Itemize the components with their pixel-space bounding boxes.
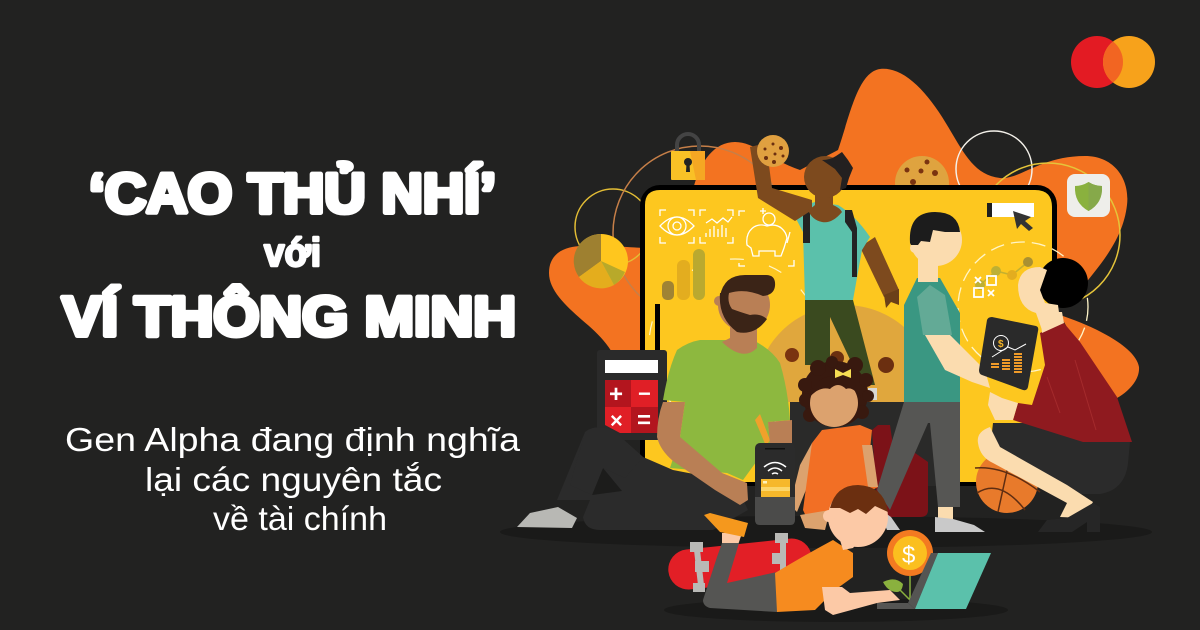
calculator bbox=[597, 350, 667, 440]
title: với bbox=[264, 231, 321, 275]
title bbox=[62, 162, 516, 348]
dotted line chart bbox=[975, 257, 1033, 290]
laptop bbox=[877, 553, 991, 609]
green shirt bbox=[663, 340, 790, 480]
coin plant bbox=[883, 530, 933, 603]
grey trousers bbox=[877, 402, 960, 510]
icon: phone with contactless payment bbox=[755, 443, 795, 525]
hair bow bbox=[835, 369, 851, 378]
subtitle: về tài chính bbox=[213, 500, 387, 537]
icon: qr code bbox=[974, 276, 996, 297]
subtitle bbox=[65, 421, 521, 537]
icon: pie chart bbox=[574, 234, 628, 288]
icon: piggy bank bbox=[739, 208, 794, 266]
character: standing boy bbox=[877, 212, 990, 532]
title: VÍ THÔNG MINH bbox=[62, 284, 516, 348]
subtitle: lại các nguyên tắc bbox=[145, 461, 442, 498]
calculator: − bbox=[638, 381, 651, 406]
lower screen shadow bbox=[790, 402, 960, 486]
icon: shield badge bbox=[1067, 174, 1110, 217]
calculator: = bbox=[637, 407, 651, 434]
ground shadows bbox=[500, 516, 1152, 622]
held tablet with coin growth chart bbox=[979, 317, 1038, 390]
held tablet with coin growth chart: $ bbox=[998, 339, 1004, 350]
character: woman bbox=[975, 258, 1132, 532]
orange background blobs bbox=[549, 69, 1139, 400]
address bar with cursor bbox=[987, 203, 1034, 231]
logo: two overlapping circles bbox=[1071, 36, 1155, 88]
tablet screen bbox=[640, 185, 1088, 486]
title: ‘CAO THỦ NHÍ’ bbox=[89, 162, 496, 224]
backpack bbox=[872, 425, 928, 517]
icon: eye bbox=[660, 210, 694, 243]
character: seated girl bbox=[790, 356, 878, 530]
screen dashed arc bbox=[649, 259, 821, 431]
icon: line and bar chart bbox=[700, 210, 733, 243]
outline circles bbox=[575, 131, 1120, 320]
skateboard bbox=[666, 533, 814, 592]
cookie peeking behind screen bbox=[895, 156, 949, 210]
big cookie bbox=[755, 305, 935, 402]
calculator: + bbox=[609, 381, 623, 408]
icon: padlock bbox=[671, 134, 705, 180]
character: child with cookie bbox=[750, 135, 899, 400]
calculator: × bbox=[610, 408, 623, 433]
held cookie bbox=[757, 135, 789, 167]
character: child lying with laptop bbox=[666, 485, 991, 615]
trousers bbox=[557, 427, 748, 530]
bar chart icon bbox=[662, 249, 705, 300]
coin plant: $ bbox=[902, 542, 915, 569]
character: seated man bbox=[517, 275, 792, 530]
subtitle: Gen Alpha đang định nghĩa bbox=[65, 421, 521, 458]
